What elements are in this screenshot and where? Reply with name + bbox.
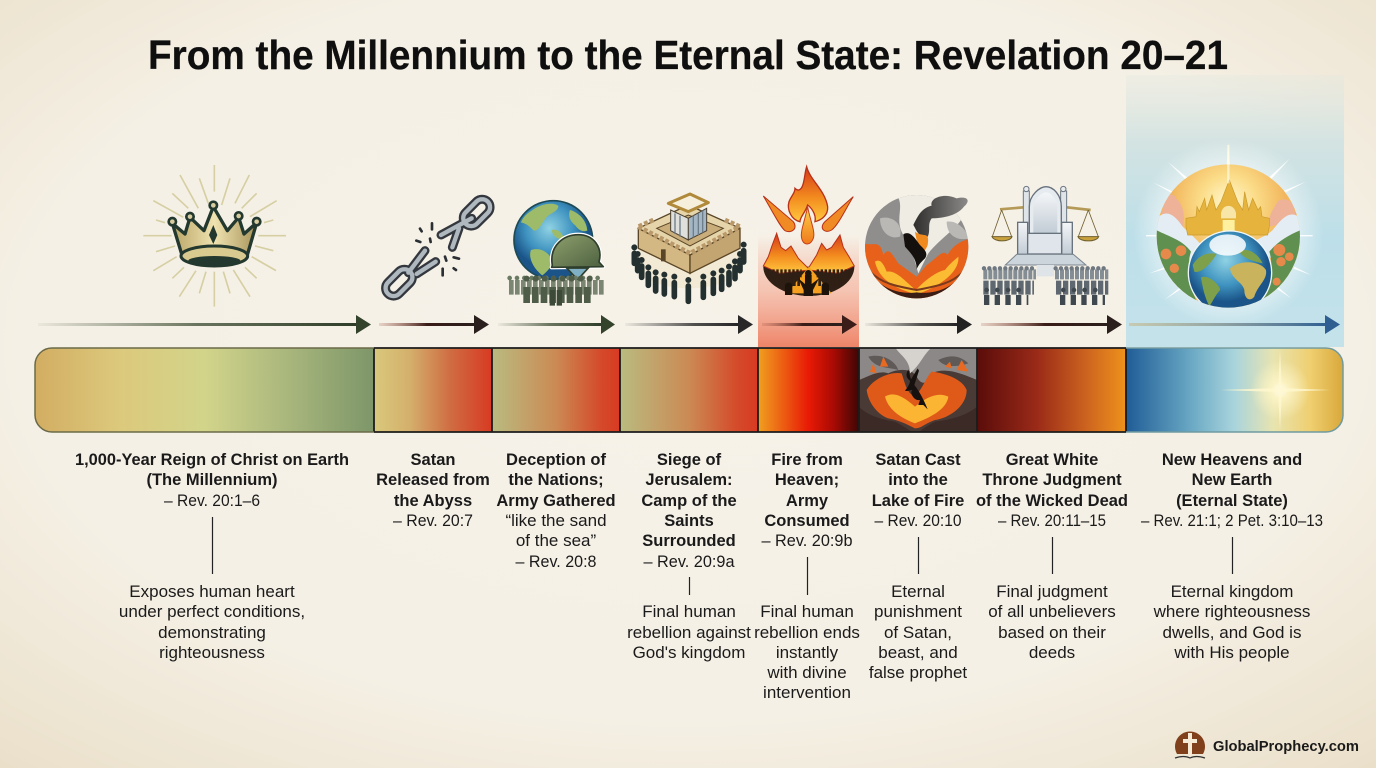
column: fire from heaven: – Rev. 20:9b — [762, 532, 852, 550]
column: lake of fire — [869, 451, 967, 682]
column: deception of the nations: Deception of — [506, 451, 606, 469]
column: lake of fire: Lake of Fire — [872, 492, 964, 510]
column: new heavens and new earth: New Heavens and — [1162, 451, 1302, 469]
arrow: eternal state — [1129, 315, 1340, 334]
column: lake of fire: into the — [888, 471, 948, 489]
arrow: judgment — [981, 315, 1122, 334]
icon: crown with rays — [143, 165, 286, 307]
column: siege of jerusalem: – Rev. 20:9a — [644, 553, 735, 571]
icon: besieged city — [634, 194, 744, 301]
title: From the Millennium to the Eternal State: Revelation 20–21 — [148, 32, 1228, 78]
arrow: release — [379, 315, 489, 334]
column: new heavens and new earth: New Earth — [1192, 471, 1272, 489]
column: fire from heaven: Army — [786, 492, 829, 510]
column: satan released: Released from — [376, 471, 490, 489]
column: siege of jerusalem — [627, 451, 751, 662]
column: siege of jerusalem: Camp of the — [641, 492, 737, 510]
column: siege of jerusalem: rebellion against — [627, 623, 751, 642]
column: lake of fire: – Rev. 20:10 — [874, 512, 962, 530]
column: great white throne: of all unbelievers — [988, 602, 1116, 621]
column: great white throne: Throne Judgment — [982, 471, 1122, 489]
icon: satan falling into flames — [864, 195, 968, 298]
column: siege of jerusalem: Saints — [664, 512, 714, 530]
logo: GlobalProphecy.com — [1175, 732, 1359, 758]
column: deception of the nations: the Nations; — [508, 471, 604, 489]
column: new heavens and new earth: Eternal kingdom — [1171, 582, 1293, 601]
column: great white throne: deeds — [1029, 643, 1075, 662]
star — [1220, 350, 1330, 430]
column: fire from heaven: Fire from — [771, 451, 843, 469]
arrow: fire — [762, 315, 857, 334]
icon: globe, helmet and army — [509, 201, 605, 306]
panel: fire glow — [758, 235, 859, 347]
column: satan released: the Abyss — [394, 492, 472, 510]
column: fire from heaven — [754, 451, 860, 702]
column: deception of the nations: – Rev. 20:8 — [516, 553, 596, 571]
lake of fire thumbnail — [859, 347, 977, 433]
column: fire from heaven: with divine — [766, 663, 847, 682]
column: deception of the nations: of the sea” — [516, 531, 597, 550]
column: siege of jerusalem: Surrounded — [642, 532, 736, 550]
column: 1,000-year reign: Exposes human heart — [129, 582, 295, 601]
column: 1,000-year reign: righteousness — [159, 643, 265, 662]
column: fire from heaven: intervention — [763, 683, 851, 702]
column: lake of fire: false prophet — [869, 663, 967, 682]
icon: fire from heaven — [763, 167, 854, 296]
column: 1,000-year reign — [75, 451, 349, 662]
column: new heavens and new earth: – Rev. 21:1; 2 Pet. 3:10–13 — [1141, 512, 1323, 530]
column: satan released: Satan — [411, 451, 455, 469]
column: fire from heaven: Consumed — [764, 512, 850, 530]
panel: eternal state glow — [1126, 75, 1344, 347]
column: satan released: – Rev. 20:7 — [393, 512, 473, 530]
column: great white throne: of the Wicked Dead — [976, 492, 1128, 510]
column: 1,000-year reign: – Rev. 20:1–6 — [164, 492, 260, 510]
column: new heavens and new earth: (Eternal State) — [1176, 492, 1288, 510]
timeline bar — [35, 347, 1343, 433]
column: siege of jerusalem: God's kingdom — [633, 643, 745, 662]
column: siege of jerusalem: Jerusalem: — [645, 471, 733, 489]
column: 1,000-year reign: demonstrating — [158, 623, 266, 642]
column: satan released — [376, 451, 490, 530]
column: deception of the nations: Army Gathered — [496, 492, 616, 510]
column: great white throne: Great White — [1006, 451, 1098, 469]
logo: GlobalProphecy.com: GlobalProphecy.com — [1213, 739, 1359, 755]
column: new heavens and new earth: with His people — [1173, 643, 1290, 662]
column: siege of jerusalem: Final human — [642, 602, 736, 621]
column: new heavens and new earth — [1141, 451, 1323, 662]
column: great white throne: based on their — [998, 623, 1106, 642]
column: lake of fire: Eternal — [891, 582, 945, 601]
column: lake of fire: of Satan, — [884, 623, 952, 642]
column: deception of the nations: “like the sand — [505, 511, 607, 530]
arrow: deception — [498, 315, 615, 334]
arrow: lake of fire — [865, 315, 972, 334]
column: great white throne — [976, 451, 1128, 662]
column: fire from heaven: Final human — [760, 602, 854, 621]
arrow: millennium — [38, 315, 371, 334]
column: fire from heaven: instantly — [776, 643, 839, 662]
column: new heavens and new earth: where righteousness — [1153, 602, 1310, 621]
column: 1,000-year reign: under perfect conditions, — [119, 602, 305, 621]
column: siege of jerusalem: Siege of — [657, 451, 722, 469]
column: lake of fire: Satan Cast — [875, 451, 961, 469]
column: fire from heaven: rebellion ends — [754, 623, 860, 642]
icon: great white throne with scales — [983, 186, 1108, 300]
icon: broken chain — [382, 196, 493, 299]
column: lake of fire: beast, and — [878, 643, 958, 662]
column: 1,000-year reign: (The Millennium) — [146, 471, 278, 489]
column: lake of fire: punishment — [874, 602, 962, 621]
column: fire from heaven: Heaven; — [775, 471, 839, 489]
icon: new heavens and new earth — [1141, 144, 1316, 320]
column: deception of the nations — [496, 451, 616, 571]
column: new heavens and new earth: dwells, and God is — [1163, 623, 1301, 642]
arrow: siege — [625, 315, 753, 334]
column: great white throne: – Rev. 20:11–15 — [998, 512, 1106, 530]
column: great white throne: Final judgment — [996, 582, 1108, 601]
column: 1,000-year reign: 1,000-Year Reign of Christ on Earth — [75, 451, 349, 469]
